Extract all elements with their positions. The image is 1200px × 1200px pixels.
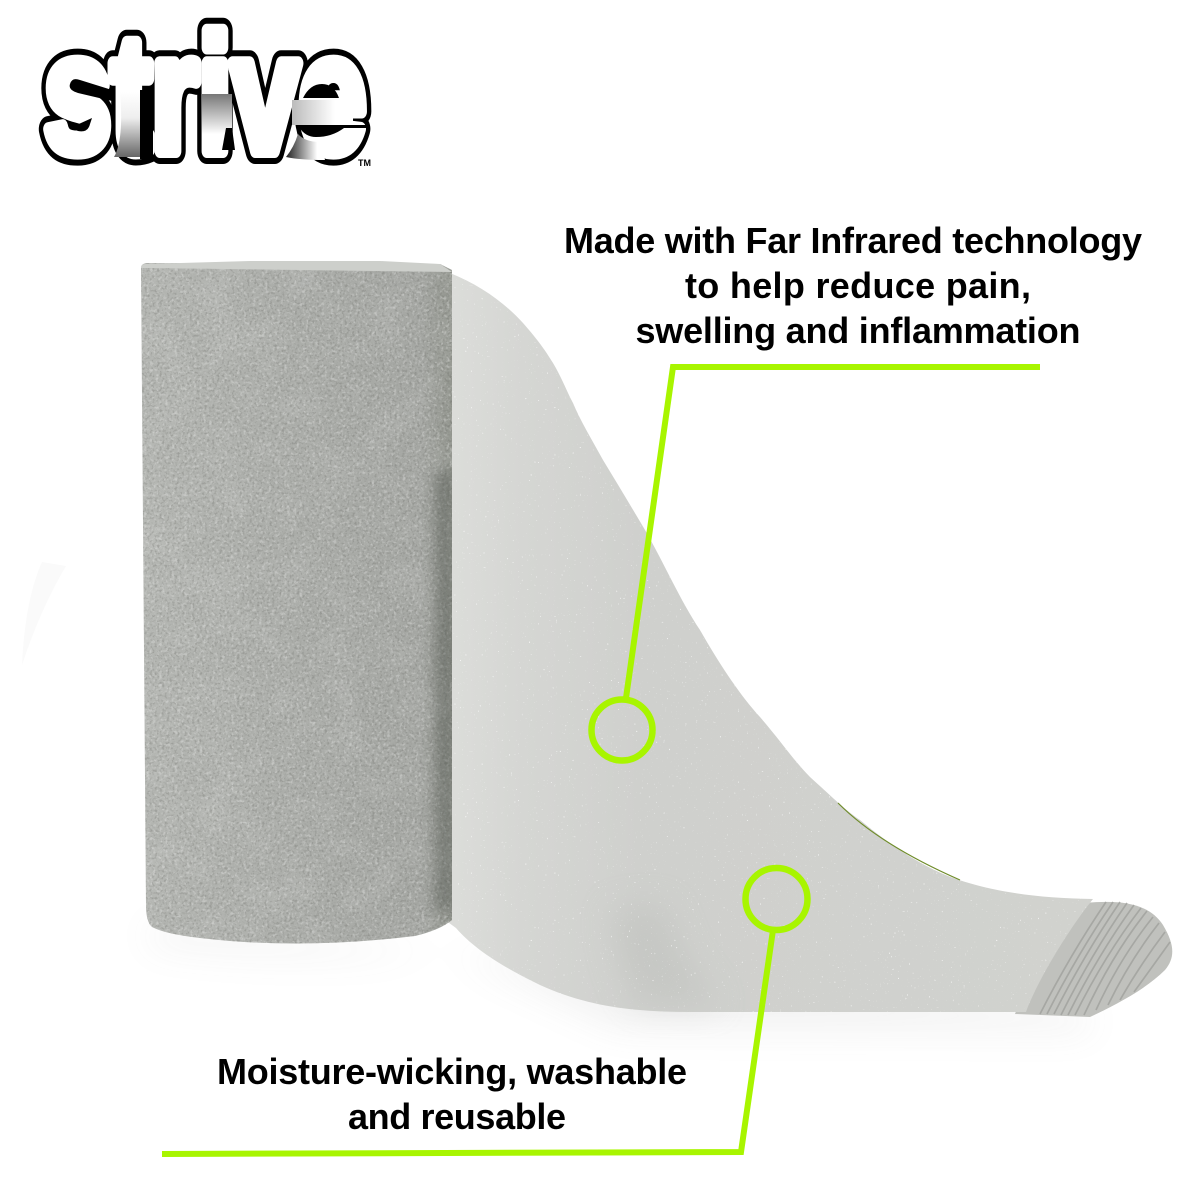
callout text: far infrared: swelling and inflammation [636,310,1080,351]
roll dark inner edge [436,470,454,910]
logo t and r shading [114,92,140,157]
green edge under strip [838,803,960,880]
roll top edge [141,261,452,272]
faint background smudge [22,562,66,665]
roll lighter patches [141,263,452,944]
callout text: far infrared: to help reduce pain, [685,265,1031,306]
callout text: moisture-wicking: and reusable [348,1096,566,1137]
trademark mark: TM [358,158,371,168]
callout text: far infrared [564,220,1142,351]
roll foam dark grain [141,263,452,944]
roll foam texture [141,263,452,944]
logo: strive: strive [44,2,366,187]
foam roll [141,261,454,944]
callout text: moisture-wicking [217,1051,687,1137]
callout text: moisture-wicking: Moisture-wicking, washable [217,1051,687,1092]
callout bottom: connector and circle [162,868,808,1154]
product shadow [150,925,1090,1032]
strip shading fold [612,905,720,1005]
ribbed strip end [1015,902,1172,1017]
callout top: connector and circle [592,367,1040,760]
bandage strip [445,268,1093,1012]
logo i and v shading [202,94,232,144]
logo: strive: strive [44,2,366,187]
callout text: far infrared: Made with Far Infrared technology [564,220,1142,261]
strip speckle [450,273,1093,1012]
logo s details [70,79,112,131]
logo e details [303,84,339,98]
